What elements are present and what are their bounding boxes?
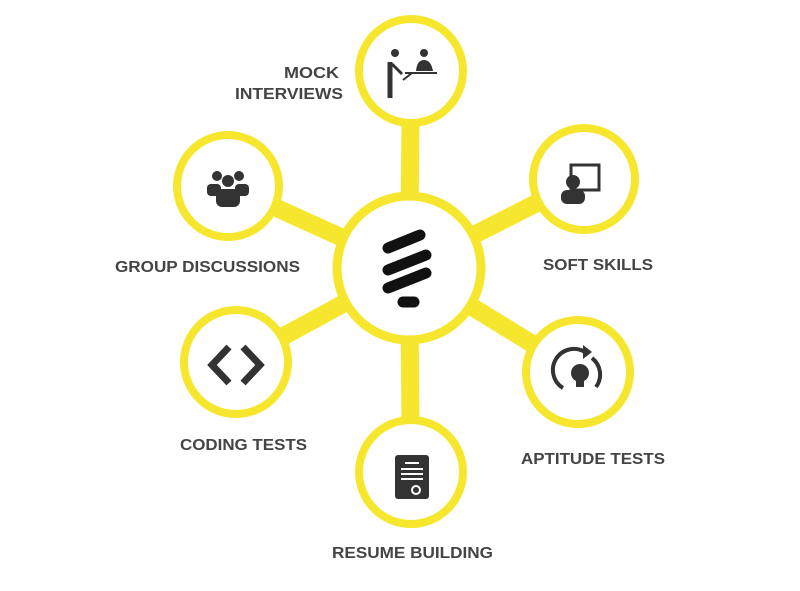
label: mock interviews	[235, 65, 343, 103]
icon: presenter	[561, 165, 599, 204]
label: coding tests: CODING TESTS	[180, 437, 307, 454]
icon: group	[207, 171, 249, 207]
node: coding tests	[184, 310, 288, 414]
icon: code	[212, 347, 260, 383]
icon: bulb	[388, 235, 426, 302]
node: group discussions	[177, 135, 279, 237]
center hub	[337, 196, 481, 340]
icon: bulb rotate	[553, 345, 600, 388]
label: aptitude tests: APTITUDE TESTS	[521, 451, 665, 468]
label: soft skills: SOFT SKILLS	[543, 257, 653, 274]
label: mock interviews: MOCK	[284, 65, 339, 82]
label: mock interviews: INTERVIEWS	[235, 86, 343, 103]
node: aptitude tests	[526, 320, 630, 424]
icon: interview	[390, 49, 437, 98]
node: mock interviews	[359, 19, 463, 123]
label: resume building: RESUME BUILDING	[332, 545, 493, 562]
label: group discussions: GROUP DISCUSSIONS	[115, 259, 300, 276]
connectors	[228, 71, 584, 472]
node: soft skills	[533, 128, 635, 230]
icon: document	[395, 455, 429, 499]
node: resume building	[359, 420, 463, 524]
